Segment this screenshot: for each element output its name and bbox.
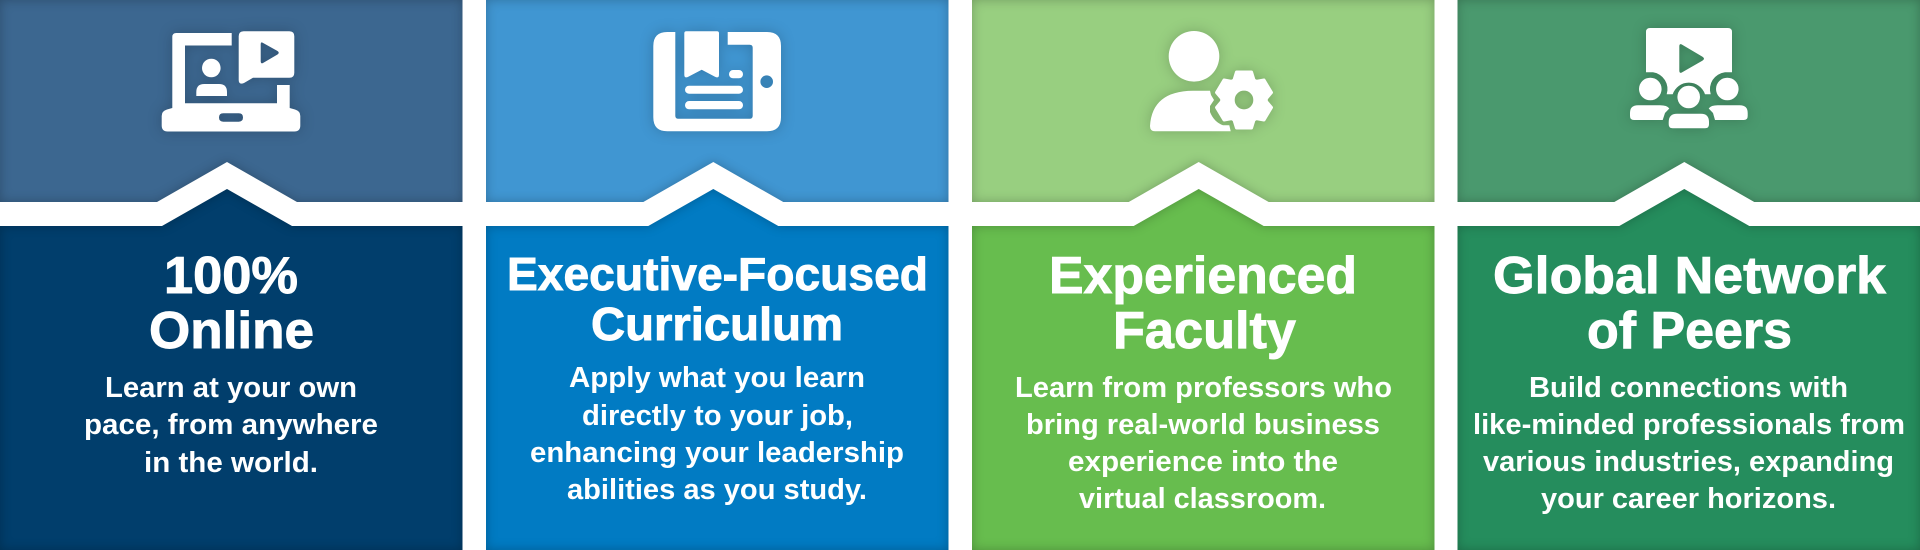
bottom block: [486, 189, 948, 550]
panel: Experienced Faculty: [972, 0, 1434, 550]
heading: [507, 248, 928, 350]
panel: 100% Online: [0, 0, 462, 550]
body text: [1473, 372, 1905, 515]
body text: virtual classroom.: [1079, 483, 1326, 515]
top block: [486, 0, 948, 202]
body text: [84, 372, 378, 479]
heading: [1049, 247, 1357, 360]
heading: of Peers: [1587, 302, 1792, 360]
body text: abilities as you study.: [567, 474, 867, 506]
top block: [972, 0, 1434, 202]
heading: [1493, 247, 1886, 360]
heading: Curriculum: [591, 298, 843, 350]
heading: 100%: [164, 247, 298, 305]
icon: laptop with presenter and video bubble: [162, 31, 300, 131]
body text: directly to your job,: [582, 400, 853, 432]
heading: Executive-Focused: [507, 248, 928, 300]
body text: experience into the: [1068, 446, 1338, 478]
bottom block: [0, 189, 462, 550]
body text: [530, 362, 904, 506]
body text: Build connections with: [1529, 372, 1848, 404]
bottom block: [972, 189, 1434, 550]
body text: like-minded professionals from: [1473, 409, 1905, 441]
heading: Global Network: [1493, 247, 1886, 305]
panel: Executive-Focused Curriculum: [486, 0, 948, 550]
icon: tablet with bookmark: [653, 31, 781, 131]
bottom block: [1458, 189, 1920, 550]
top block: [1458, 0, 1920, 202]
icon: person with gear: [1150, 31, 1272, 131]
body text: enhancing your leadership: [530, 437, 904, 469]
heading: Faculty: [1113, 302, 1296, 360]
panel: Global Network of Peers: [1458, 0, 1920, 550]
body text: [1015, 372, 1392, 515]
body text: pace, from anywhere: [84, 409, 378, 441]
body text: Apply what you learn: [569, 362, 865, 394]
heading: [149, 247, 314, 360]
body text: various industries, expanding: [1483, 446, 1894, 478]
heading: Experienced: [1049, 247, 1357, 305]
body text: Learn at your own: [105, 372, 357, 404]
top block: [0, 0, 462, 202]
icon: audience watching video: [1630, 28, 1748, 128]
body text: your career horizons.: [1541, 483, 1836, 515]
body text: Learn from professors who: [1015, 372, 1392, 404]
body text: bring real-world business: [1026, 409, 1380, 441]
heading: Online: [149, 302, 314, 360]
body text: in the world.: [144, 447, 318, 479]
